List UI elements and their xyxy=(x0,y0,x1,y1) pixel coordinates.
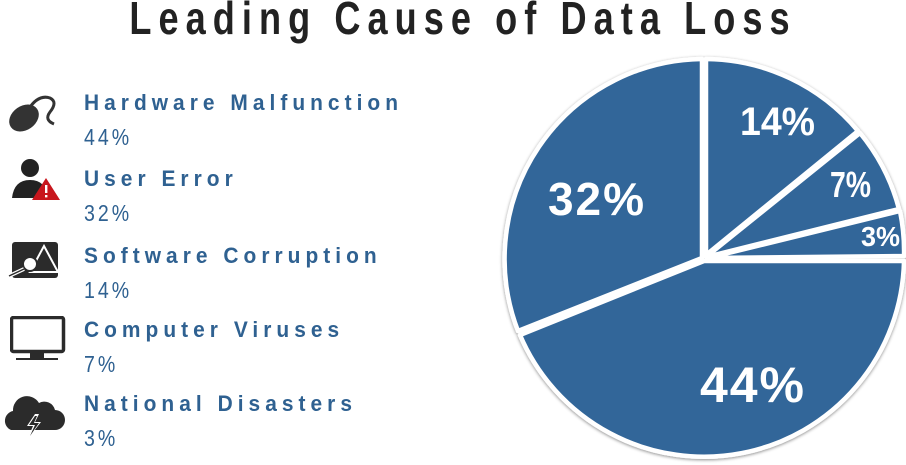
icon: software xyxy=(8,242,58,278)
label 32%: 32% xyxy=(548,173,644,225)
label: disasters: National Disasters xyxy=(84,391,357,416)
slice 32% xyxy=(505,59,702,331)
icon: monitor xyxy=(10,316,66,360)
legend xyxy=(4,90,403,451)
pct: hardware: 44% xyxy=(84,124,132,150)
icon: storm cloud xyxy=(4,396,65,436)
pct: software: 14% xyxy=(84,277,132,303)
label 44%: 44% xyxy=(700,357,804,413)
pct: viruses: 7% xyxy=(84,351,118,377)
label: user error: User Error xyxy=(84,166,238,191)
slice 3% xyxy=(708,211,904,258)
pct: disasters: 3% xyxy=(84,425,118,451)
label 14%: 14% xyxy=(740,100,815,144)
slice 44% xyxy=(520,261,904,457)
label: viruses: Computer Viruses xyxy=(84,317,344,342)
label: software: Software Corruption xyxy=(84,243,382,268)
icon: user error xyxy=(12,159,60,200)
slice 7% xyxy=(706,133,899,257)
icon: mouse xyxy=(9,96,56,132)
label 7%: 7% xyxy=(830,164,871,205)
label 3%: 3% xyxy=(861,221,900,252)
pct: user error: 32% xyxy=(84,200,132,226)
slice 14% xyxy=(706,59,858,255)
label: hardware: Hardware Malfunction xyxy=(84,90,403,115)
